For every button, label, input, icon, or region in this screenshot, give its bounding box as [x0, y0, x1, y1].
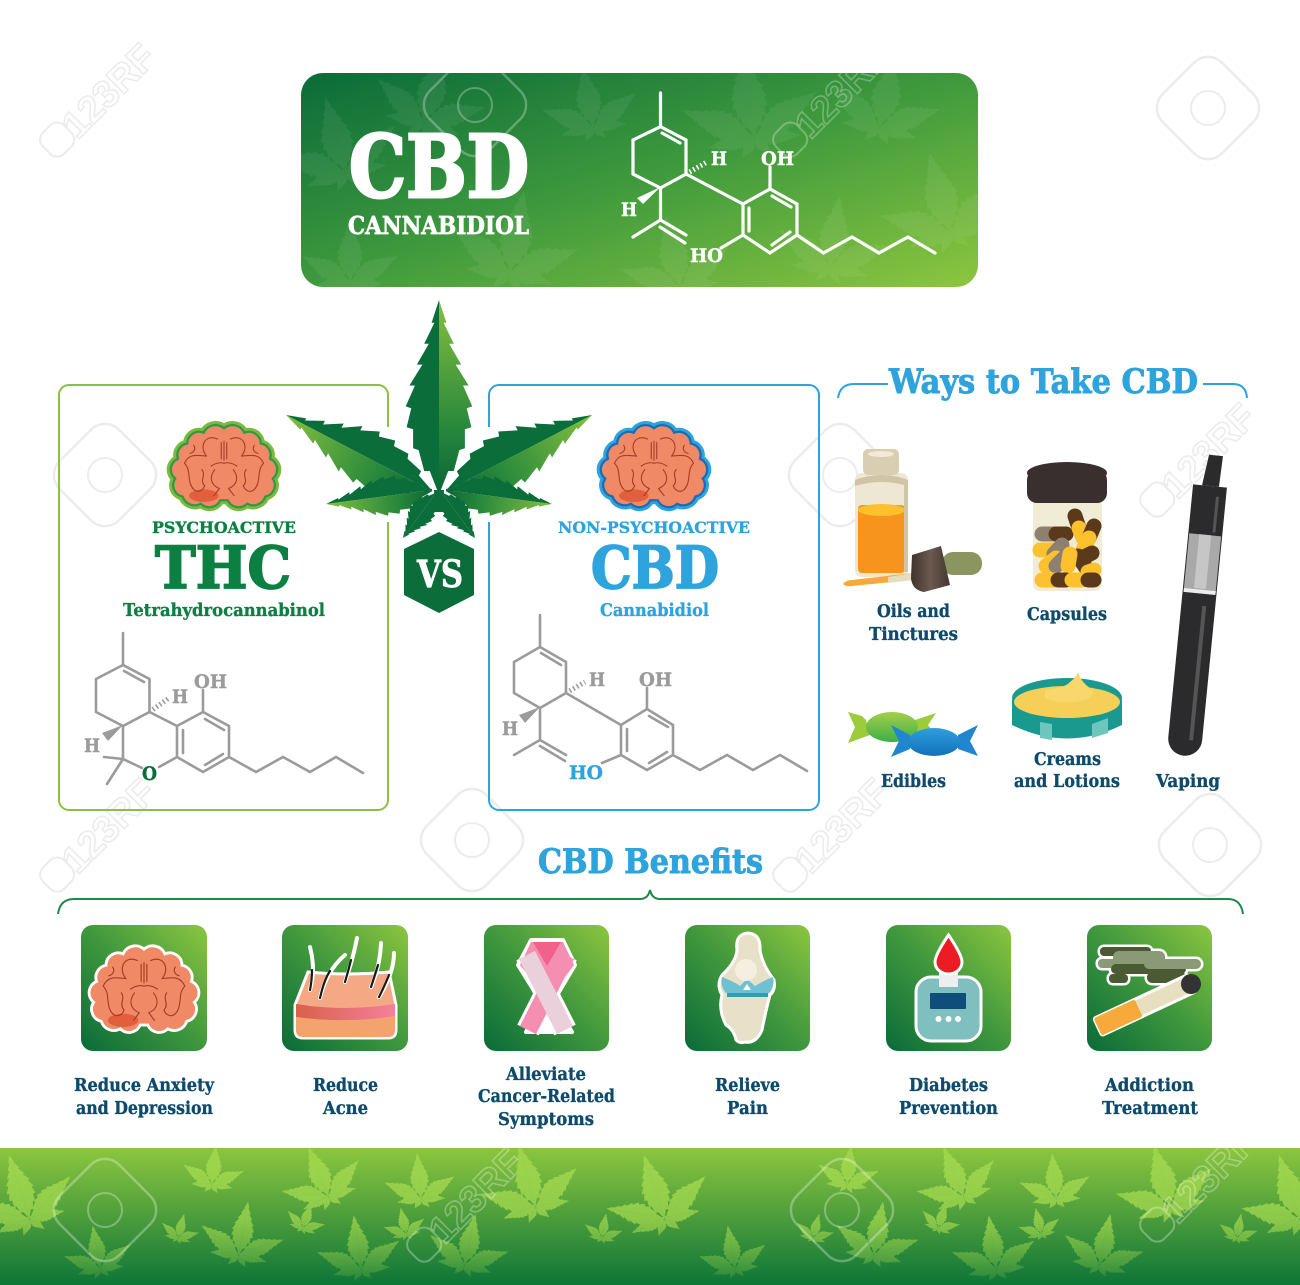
- chemical structure: CBD: HO: [569, 762, 603, 784]
- chemical structure: CBD white: H: [621, 199, 637, 221]
- chemical structure: CBD white: HO: [690, 245, 723, 267]
- icon: CBD brain: [601, 425, 707, 507]
- bracket: [58, 890, 1243, 914]
- section: Ways to Take CBD: [838, 362, 1247, 792]
- bracket: [838, 384, 1247, 398]
- badge: VS hexagon: [404, 532, 474, 613]
- label: Reduce: Reduce: [313, 1076, 378, 1096]
- heading: CBD: CBD: [591, 534, 719, 602]
- label: and Lotions: and Lotions: [1014, 772, 1120, 792]
- icon: skin layers: [295, 938, 396, 1038]
- chemical structure: THC: H: [84, 735, 100, 757]
- label: Addiction: Addiction: [1104, 1076, 1194, 1096]
- banner title: CBD: CBD: [349, 117, 529, 218]
- label: Capsules: Capsules: [1027, 605, 1107, 625]
- label: Tetrahydrocannabinol: Tetrahydrocannabinol: [123, 600, 325, 621]
- label: Oils and: Oils and: [877, 602, 950, 622]
- footer band with leaves: [0, 1121, 1300, 1285]
- icon: THC brain: [171, 425, 277, 507]
- heading: Ways to Take CBD: Ways to Take CBD: [888, 362, 1198, 402]
- chemical structure: THC: H: [172, 686, 188, 708]
- icon: vape pen: [1167, 453, 1230, 757]
- chemical structure: CBD white: H: [711, 148, 727, 170]
- label: Symptoms: Symptoms: [498, 1110, 594, 1130]
- label: Cannabidiol: Cannabidiol: [600, 600, 709, 621]
- label: non-psychoactive: NON-PSYCHOACTIVE: [558, 518, 750, 537]
- chemical structure: CBD white: OH: [761, 148, 794, 170]
- banner subtitle: Cannabidiol: CANNABIDIOL: [348, 211, 529, 240]
- label: Pain: Pain: [727, 1099, 768, 1119]
- panel: CBD: [485, 385, 819, 810]
- icon: brain: [89, 946, 199, 1032]
- chemical structure: THC: OH: [194, 671, 227, 693]
- icon: capsule jar: [1027, 462, 1107, 591]
- chemical structure: CBD white: [621, 93, 935, 267]
- card: pain: [685, 925, 810, 1051]
- card: addiction: [1087, 925, 1212, 1051]
- badge: VS hexagon: VS: [416, 552, 463, 596]
- icon: oil bottle and dropper: [843, 449, 982, 592]
- label: Treatment: Treatment: [1102, 1099, 1198, 1119]
- chemical structure: CBD: [502, 615, 807, 784]
- label: Alleviate: Alleviate: [505, 1065, 586, 1085]
- card: reduce anxiety: [81, 925, 207, 1051]
- chemical structure: CBD: OH: [639, 669, 672, 691]
- label: Relieve: Relieve: [715, 1076, 780, 1096]
- panel: top CBD banner: [262, 36, 1024, 318]
- card: reduce acne: [282, 925, 408, 1051]
- label: Creams: Creams: [1034, 750, 1101, 770]
- card: cancer: [484, 925, 609, 1051]
- label: Cancer-Related: Cancer-Related: [478, 1087, 615, 1107]
- label: Diabetes: Diabetes: [909, 1076, 988, 1096]
- label: Tinctures: Tinctures: [869, 625, 958, 645]
- icon: central cannabis leaf: [273, 300, 605, 546]
- label: Reduce Anxiety: Reduce Anxiety: [74, 1076, 215, 1096]
- chemical structure: THC: O: [142, 763, 157, 785]
- label: Acne: Acne: [322, 1099, 368, 1119]
- panel: THC: [59, 385, 392, 810]
- label: Edibles: Edibles: [881, 772, 946, 792]
- icon: knee joint: [719, 933, 774, 1043]
- chemical structure: CBD: H: [589, 669, 605, 691]
- heading: CBD Benefits: CBD Benefits: [538, 842, 763, 882]
- icon: cigarette and smoke: [1094, 947, 1201, 1036]
- chemical structure: THC: [84, 633, 363, 785]
- icon: cream jar: [1012, 672, 1122, 740]
- chemical structure: CBD: H: [502, 718, 518, 740]
- label: Prevention: Prevention: [899, 1099, 998, 1119]
- card: diabetes: [886, 925, 1011, 1051]
- heading: THC: THC: [155, 534, 291, 602]
- label: Vaping: Vaping: [1155, 772, 1220, 792]
- label: and Depression: and Depression: [76, 1099, 213, 1119]
- icon: glucose meter: [916, 935, 981, 1041]
- icon: candies: [848, 712, 978, 757]
- icon: pink ribbon: [518, 940, 575, 1032]
- section: CBD Benefits: [58, 842, 1243, 1130]
- label: psychoactive: PSYCHOACTIVE: [152, 518, 296, 537]
